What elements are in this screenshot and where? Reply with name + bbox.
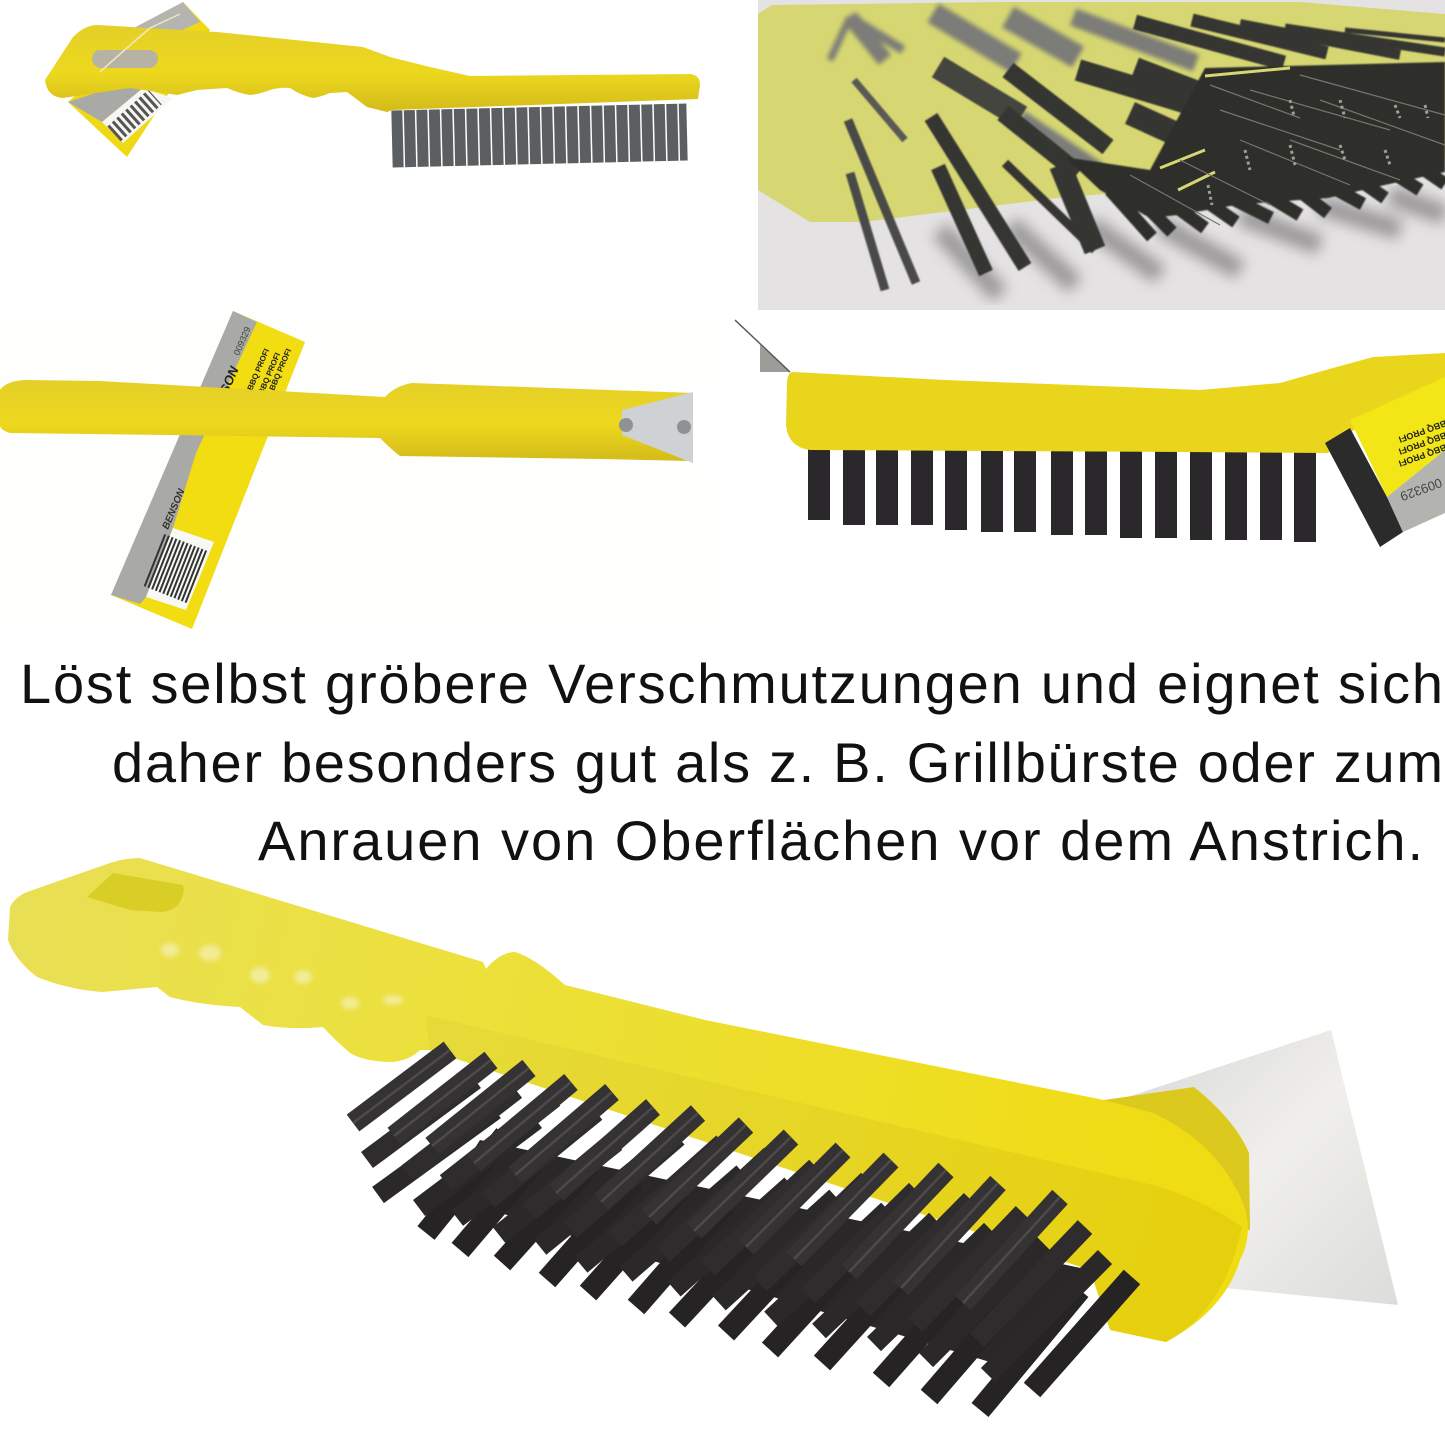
tag — [1325, 377, 1445, 547]
text block: description: Löst selbst gröbere Verschmutzungen und eignet sich — [20, 652, 1443, 715]
dense bristle mass — [1065, 62, 1445, 218]
panel: close-up of bristles — [758, 0, 1445, 310]
tag: 009329 — [1398, 475, 1444, 504]
brush head — [786, 353, 1445, 453]
metal plate — [619, 392, 693, 463]
icon: product tag: BBQ PROFI — [246, 347, 271, 392]
bristle shadows — [940, 195, 1445, 295]
brush bristles — [819, 438, 1305, 542]
brush handle — [0, 380, 693, 461]
icon: product tag: 009329 — [232, 325, 253, 357]
bristle strand highlights — [1130, 75, 1445, 225]
bristle row 3 — [378, 1110, 1105, 1375]
head front face — [425, 1015, 1242, 1342]
blurred back tufts — [830, 13, 1196, 170]
bristle row 4 — [426, 1135, 1132, 1410]
panel: back of brush with tag and scraper plate — [0, 310, 725, 630]
panel: side view of brush head — [725, 320, 1445, 630]
bristle row 1 — [353, 1050, 1060, 1303]
brush handle — [8, 858, 520, 1062]
brush handle — [45, 25, 700, 112]
icon: tag string — [735, 320, 790, 372]
icon: product tag: BBQ PROFI — [268, 347, 293, 392]
handle grip highlights — [161, 943, 403, 1009]
handle hole — [87, 873, 184, 912]
scraper — [693, 385, 723, 473]
panel: side view of brush with tag — [45, 2, 700, 157]
text block: description — [20, 652, 1443, 872]
scraper blade — [1125, 1030, 1398, 1305]
handle hole — [92, 50, 158, 68]
bristle highlights — [353, 1050, 1060, 1303]
icon: product tag — [111, 311, 305, 629]
string loop — [100, 14, 180, 72]
text block: description: daher besonders gut als z. B. Grillbürste oder zum — [112, 731, 1443, 794]
icon: hanging tag — [68, 2, 210, 157]
dark front tufts — [848, 20, 1445, 290]
barcode — [146, 528, 214, 610]
head — [425, 952, 1248, 1342]
jagged bristle ends — [1110, 160, 1445, 237]
panel: large brush photo — [8, 858, 1398, 1410]
icon: product tag: BENSON — [161, 487, 188, 531]
brush bristles — [392, 132, 687, 139]
text block: description: Anrauen von Oberflächen vor dem Anstrich. — [258, 809, 1423, 872]
icon: product tag: BBQ PROFI — [257, 351, 282, 396]
bristle tip specks — [1208, 100, 1428, 205]
bristle backing mass — [445, 1140, 1090, 1365]
yellow slivers between tufts — [1160, 68, 1290, 190]
bristle row 2 — [367, 1080, 1085, 1340]
brush ferrule — [1104, 1087, 1250, 1230]
tag labels: BENSON — [206, 364, 242, 421]
barcode — [102, 88, 173, 143]
